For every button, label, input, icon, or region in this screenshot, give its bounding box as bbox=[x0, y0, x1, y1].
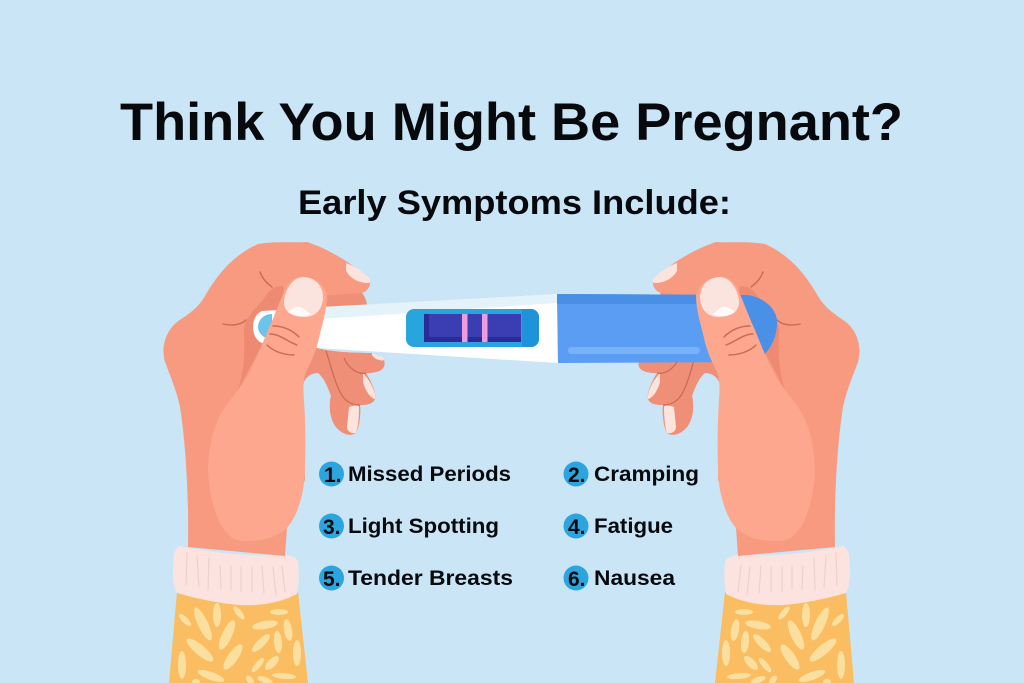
device top highlight bbox=[320, 294, 557, 319]
cap highlight bar bbox=[568, 347, 700, 354]
symptom 5: Tender Breasts bbox=[348, 567, 513, 590]
left thumb bbox=[208, 277, 327, 541]
left sleeve bbox=[169, 546, 308, 683]
symptom 1: Missed Periods bbox=[348, 463, 511, 486]
result window frame bbox=[406, 309, 539, 347]
device body bbox=[253, 294, 558, 363]
symptom 2: 2. bbox=[568, 464, 586, 487]
blue cap bbox=[557, 294, 777, 363]
symptom 3: 3. bbox=[323, 516, 341, 539]
symptom 4 bbox=[564, 514, 673, 539]
device tip bbox=[258, 314, 272, 340]
result line two bbox=[482, 314, 488, 342]
symptom 6 bbox=[564, 566, 675, 591]
right hand: palm and fingers bbox=[639, 242, 860, 556]
cap end shade bbox=[735, 295, 777, 362]
cap top band bbox=[557, 294, 765, 304]
right sleeve bbox=[715, 546, 854, 683]
symptom list bbox=[319, 462, 699, 591]
subheading: Early Symptoms Include: bbox=[298, 184, 731, 222]
symptom 3: Light Spotting bbox=[348, 515, 499, 538]
result window bbox=[424, 314, 521, 342]
title: Think You Might Be Pregnant? bbox=[120, 93, 903, 152]
symptom 6: Nausea bbox=[594, 567, 675, 590]
symptom 2: Cramping bbox=[594, 463, 699, 486]
pregnancy test device bbox=[253, 294, 777, 363]
symptom 4: Fatigue bbox=[594, 515, 673, 538]
result window frame shade bbox=[522, 309, 539, 347]
symptom 4: 4. bbox=[568, 516, 586, 539]
right thumb bbox=[696, 277, 815, 541]
symptom 5: 5. bbox=[323, 568, 341, 591]
symptom 2 bbox=[564, 462, 699, 487]
left hand: palm and fingers bbox=[164, 242, 384, 556]
result window shadow bbox=[424, 314, 521, 342]
symptom 1: 1. bbox=[324, 464, 342, 487]
result line one bbox=[462, 314, 468, 342]
symptom 6: 6. bbox=[568, 568, 586, 591]
